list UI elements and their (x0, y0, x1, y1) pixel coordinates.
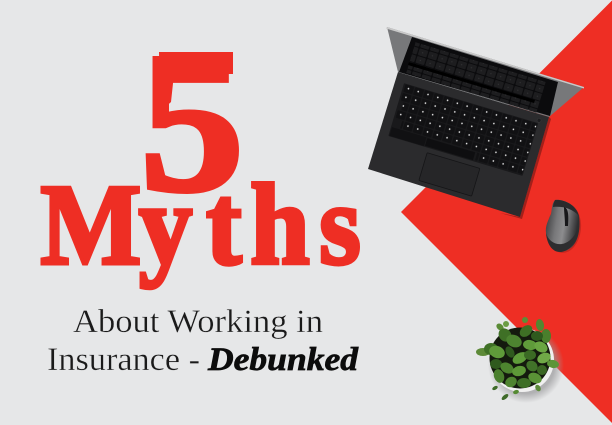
trackpad (419, 153, 480, 196)
plant pot (490, 328, 554, 392)
subtitle line 1: About Working in (73, 304, 323, 340)
icon: computer mouse (544, 200, 584, 255)
subtitle emphasis: Debunked: Debunked (207, 342, 359, 378)
plant pot shadow (488, 327, 564, 403)
laptop base (368, 72, 551, 219)
icon: potted plant (476, 317, 564, 403)
red diamond shape (401, 0, 612, 423)
keyboard (388, 83, 538, 176)
title word: Myths: Myths (40, 162, 361, 290)
title number: 5: 5 (140, 12, 244, 234)
plant leaves (476, 317, 560, 401)
icon: laptop (368, 27, 584, 219)
power button (537, 118, 542, 123)
laptop lid (386, 27, 584, 117)
subtitle line 2: Insurance - (47, 342, 200, 378)
